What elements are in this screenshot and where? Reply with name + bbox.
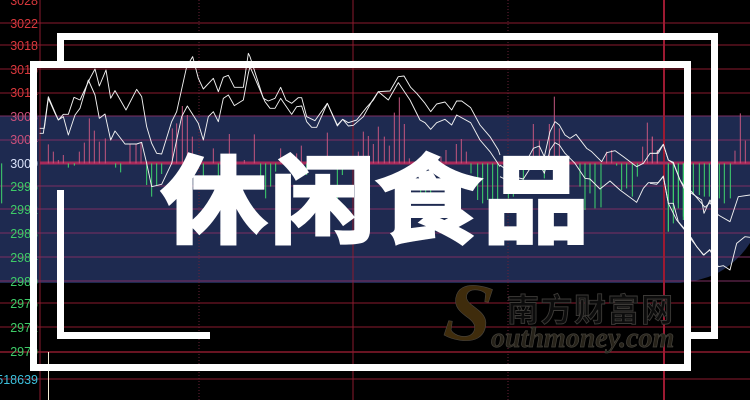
y axis labels: 2976 xyxy=(10,297,38,311)
watermark: chinese site name: 南方财富网 xyxy=(507,292,675,328)
watermark xyxy=(440,264,675,362)
y axis labels: 2970 xyxy=(10,345,38,359)
y axis labels: 2972 xyxy=(10,321,38,335)
y axis labels: 3004 xyxy=(10,133,38,147)
y axis labels: 3022 xyxy=(10,17,38,31)
y axis labels: 2988 xyxy=(10,227,38,241)
volume tick xyxy=(48,352,50,400)
y axis labels: 2984 xyxy=(10,251,38,265)
y axis labels: 2996 xyxy=(10,180,38,194)
y axis labels: 3008 xyxy=(10,110,38,124)
y axis labels: 2980 xyxy=(10,275,38,289)
blue highlight band xyxy=(0,116,750,283)
price line charts xyxy=(40,53,750,270)
volume bars: rising xyxy=(48,97,745,163)
volume bars: falling xyxy=(2,163,730,232)
watermark: site url: outhmoney.com xyxy=(491,323,674,354)
title: 休闲食品 xyxy=(161,150,589,256)
watermark: S swoosh: S xyxy=(440,264,499,362)
back frame xyxy=(60,36,714,336)
front frame xyxy=(34,64,688,368)
y axis labels xyxy=(0,0,38,387)
zero axis line xyxy=(40,162,750,164)
y axis labels: 2992 xyxy=(10,203,38,217)
y axis labels: 3018 xyxy=(10,39,38,53)
y axis labels: 3014 xyxy=(10,86,38,100)
y axis labels: 3000 xyxy=(10,157,38,171)
y axis labels: 3016 xyxy=(10,63,38,77)
